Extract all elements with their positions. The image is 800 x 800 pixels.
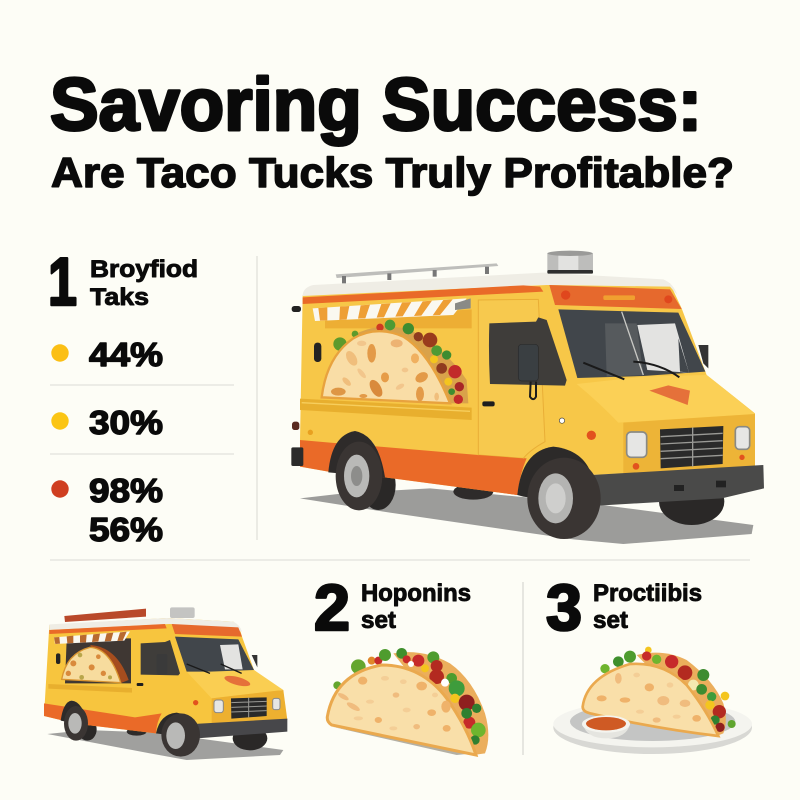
section 2 heading: Hoponins [361, 580, 471, 607]
section 2 heading [314, 571, 471, 644]
panel: section 3 [546, 571, 752, 754]
illustration: taco [327, 648, 488, 755]
title: Are Taco Tucks Truly Profitable? [51, 149, 734, 196]
rear wheel [336, 442, 382, 510]
section 1 heading: Taks [90, 284, 149, 311]
roof vent [547, 251, 593, 274]
cab door window [489, 317, 567, 386]
awning [313, 298, 472, 328]
front wheel [517, 447, 601, 539]
section 3 heading: 3 [546, 571, 582, 644]
stat: 98% and 56%: 98% [89, 472, 163, 509]
section 1 heading: Broyfiod [90, 256, 198, 283]
stat: 44%: 44% [89, 336, 163, 373]
stat: 30% [51, 404, 163, 441]
stat: 98% and 56% [51, 472, 163, 548]
stat: 44% [51, 336, 163, 373]
stat: 98% and 56%: 56% [89, 511, 163, 548]
illustration: small taco truck [44, 607, 287, 760]
taco on small truck [62, 645, 129, 683]
taco on truck side [322, 320, 468, 404]
windshield [558, 309, 705, 379]
section 2 heading: set [361, 607, 396, 634]
front grille and lights [627, 426, 750, 470]
section 1 heading: 1 [48, 244, 77, 320]
illustration: taco on plate with salsa [553, 647, 752, 754]
section 2 heading: 2 [314, 571, 350, 644]
section 3 heading: set [593, 607, 628, 634]
stat: 30%: 30% [89, 404, 163, 441]
title [50, 63, 734, 196]
section 1 heading [48, 244, 198, 320]
panel: section 1 stats [48, 244, 198, 548]
panel: section 2 [314, 571, 488, 755]
illustration: large taco truck [291, 251, 764, 544]
section 3 heading: Proctiibis [593, 580, 702, 607]
section 3 heading [546, 571, 702, 644]
salsa bowl [582, 715, 630, 738]
title: Savoring Success: [50, 63, 702, 146]
